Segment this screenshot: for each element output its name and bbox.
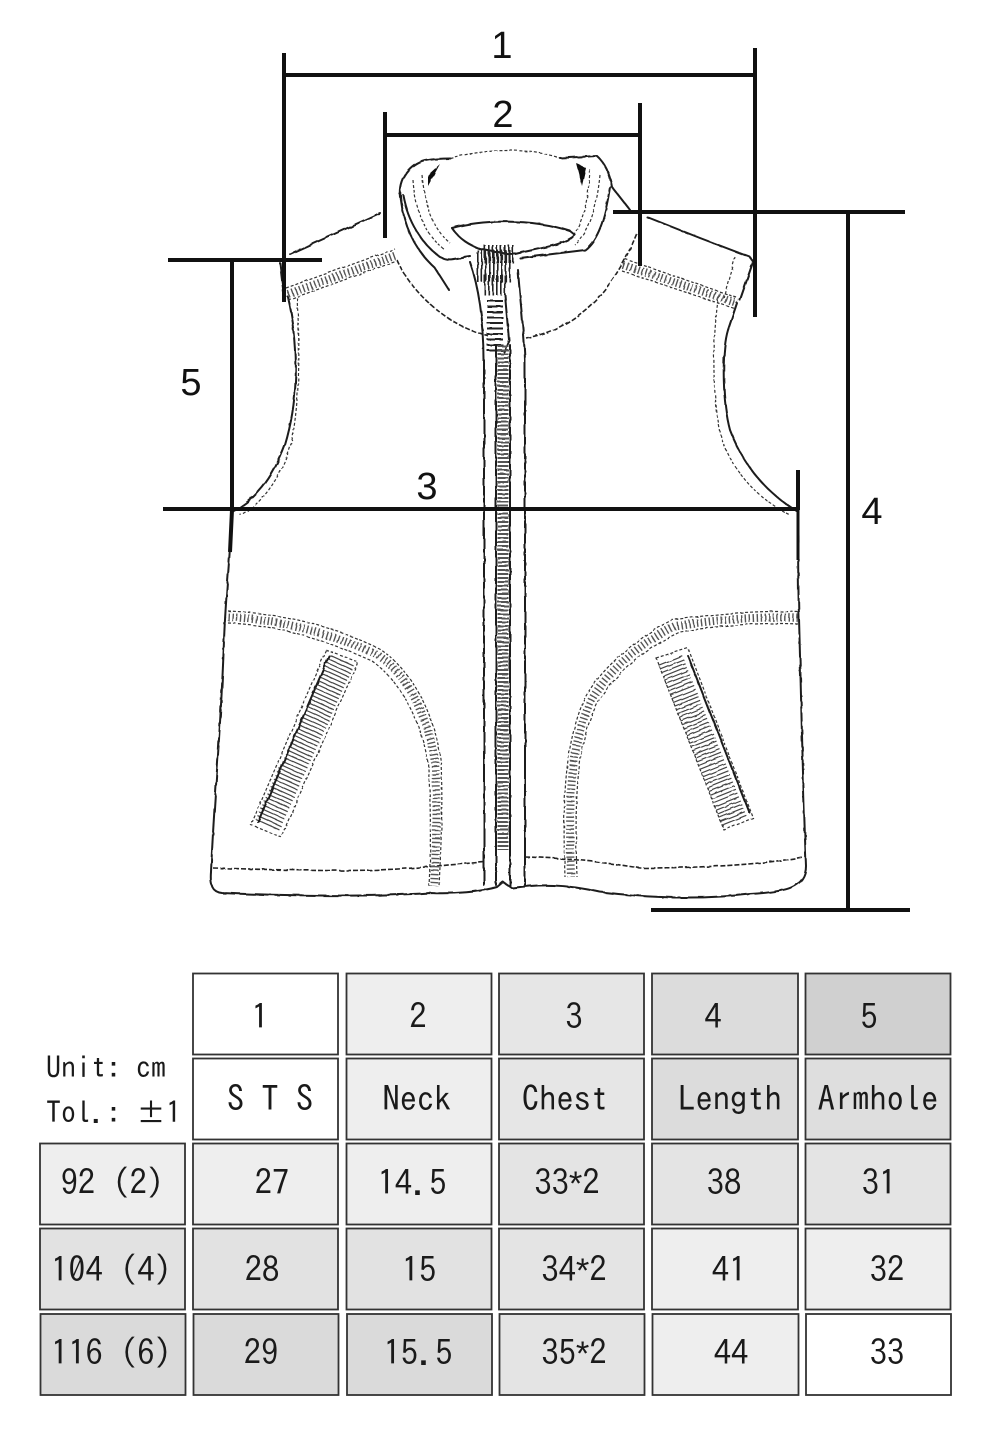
row: size 116: 116（6） (51, 1336, 189, 1370)
row: measurement numbers: 1 (251, 1000, 269, 1034)
row: size 116: 15.5 (384, 1336, 452, 1370)
left shoulder (280, 213, 397, 300)
row: size 116: 44 (714, 1336, 748, 1370)
unit and tolerance note (46, 1052, 181, 1127)
row: measurement names: Length (678, 1082, 782, 1116)
row: size 92 (40, 1144, 950, 1224)
right shoulder (622, 217, 753, 309)
left welt pocket (251, 650, 358, 837)
unit and tolerance note: Tol.: ±1 (46, 1097, 181, 1127)
dimension 4 length: 4 (861, 491, 883, 533)
row: measurement numbers: 4 (704, 1000, 722, 1034)
left pocket seam (228, 611, 442, 886)
dimension 3 chest: 3 (416, 466, 438, 508)
dimension 3 chest (163, 466, 798, 560)
right welt pocket (656, 648, 753, 830)
row: measurement numbers: 5 (860, 1000, 878, 1034)
dimension 2 neck width: 2 (492, 94, 514, 136)
row: size 92: 33*2 (534, 1165, 600, 1203)
vest body outline (211, 297, 806, 898)
dimension 1 shoulder width: 1 (491, 25, 513, 67)
row: size 116: 33 (870, 1336, 904, 1370)
row: size 104: 41 (712, 1253, 746, 1287)
row: measurement numbers (193, 974, 950, 1054)
row: size 92: 31 (862, 1166, 896, 1200)
row: size 116 (40, 1314, 951, 1395)
row: size 104 (40, 1228, 950, 1310)
row: measurement names: Neck (382, 1082, 452, 1116)
row: measurement names (193, 1058, 950, 1140)
dimension 5 armhole (168, 260, 322, 552)
row: size 104: 28 (245, 1253, 279, 1287)
dimension 4 length (613, 212, 910, 910)
collar (400, 150, 630, 290)
row: size 104: 34*2 (541, 1252, 607, 1290)
size table (40, 974, 951, 1395)
row: measurement numbers: 2 (409, 1000, 427, 1034)
yoke arc (397, 233, 637, 338)
dimension 2 neck width (385, 94, 640, 266)
zipper and placket (470, 262, 525, 885)
row: size 92: 38 (707, 1166, 741, 1200)
row: measurement names: S T S (227, 1082, 313, 1116)
vest line drawing (211, 150, 806, 898)
row: size 104: 32 (870, 1253, 904, 1287)
row: size 104: 104（4） (51, 1253, 189, 1287)
row: measurement names: Chest (522, 1082, 608, 1116)
row: size 92: 27 (255, 1166, 289, 1200)
right pocket seam (564, 611, 798, 877)
row: size 116: 29 (244, 1336, 278, 1370)
row: size 92: 14.5 (378, 1166, 446, 1200)
row: measurement names: Armhole (818, 1082, 938, 1116)
hem stitching (213, 857, 803, 871)
dimension 1 shoulder width (284, 25, 755, 317)
dimension lines (163, 25, 910, 910)
zipper pull (476, 253, 514, 352)
unit and tolerance note: Unit: cm (46, 1052, 166, 1082)
row: size 92: 92（2） (61, 1166, 181, 1200)
row: size 104: 15 (402, 1253, 436, 1287)
row: size 116: 35*2 (541, 1335, 607, 1373)
row: measurement numbers: 3 (565, 1000, 583, 1034)
dimension 5 armhole: 5 (180, 362, 202, 404)
